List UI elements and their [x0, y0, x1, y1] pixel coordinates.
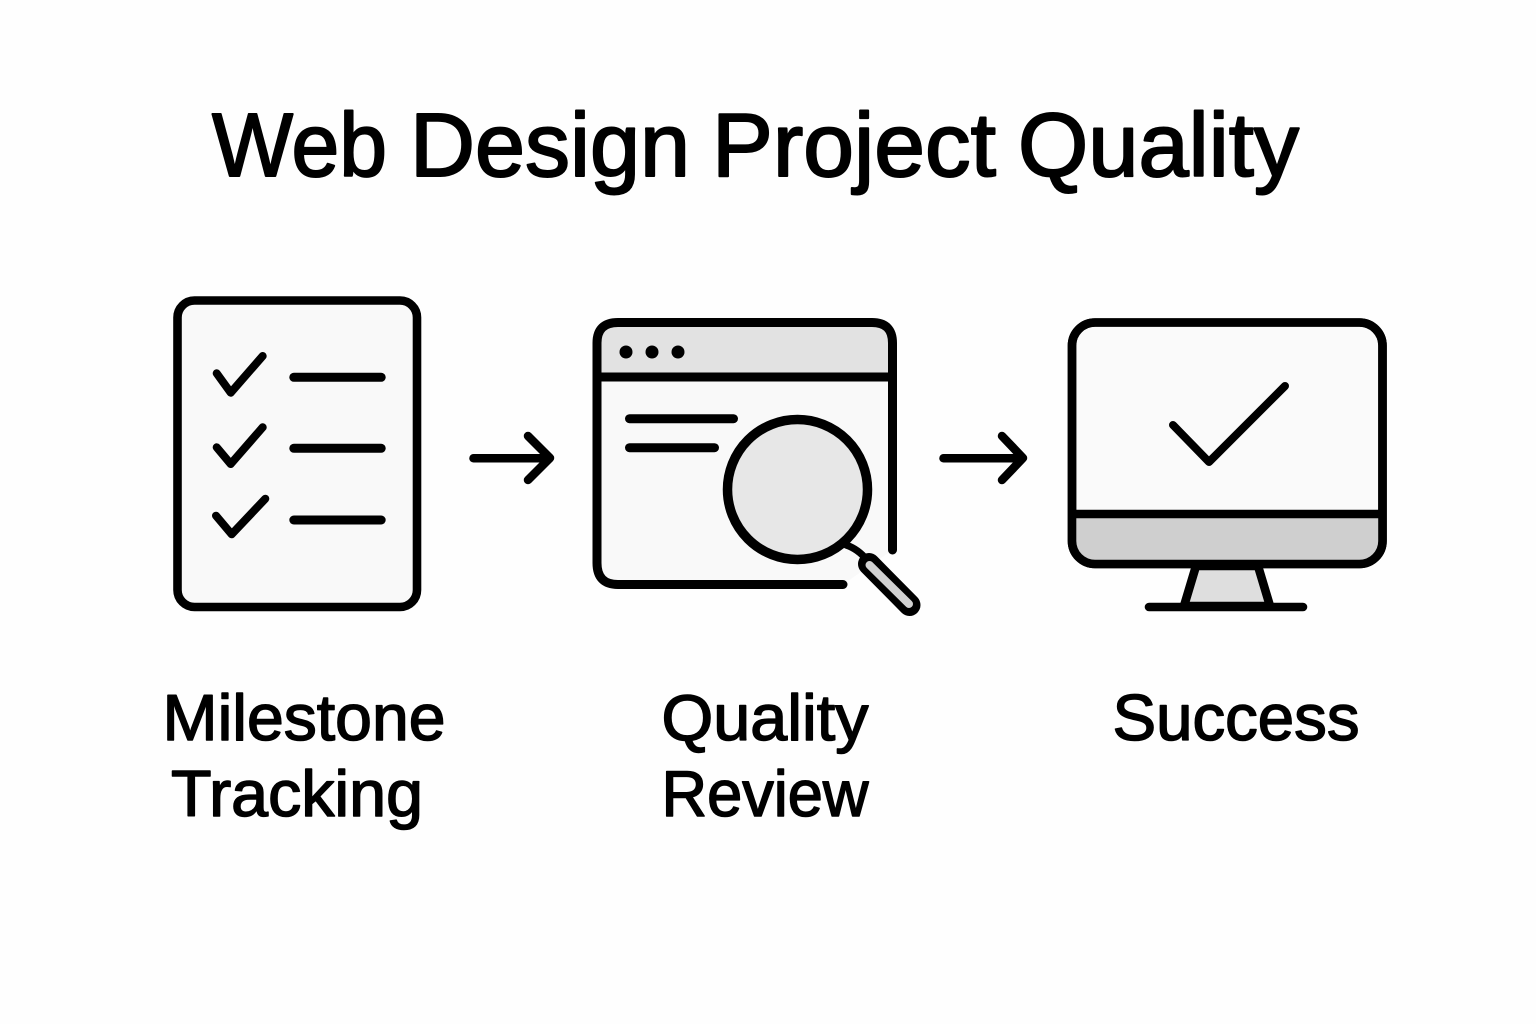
icon: monitor with checkmark	[1072, 322, 1382, 607]
title: Design	[410, 96, 690, 196]
label: quality review: Quality	[662, 681, 869, 754]
label: milestone tracking: Tracking	[171, 757, 423, 830]
icon: checklist document	[178, 300, 417, 607]
label: quality review	[662, 681, 870, 830]
label: success: Success	[1112, 681, 1360, 754]
label: quality review: Review	[662, 757, 870, 830]
label: milestone tracking	[162, 681, 446, 830]
title: Project	[712, 96, 996, 196]
label: milestone tracking: Milestone	[162, 681, 446, 754]
title: Quality	[1018, 96, 1299, 196]
title: Web	[212, 96, 387, 196]
arrow: checklist to review	[474, 436, 550, 480]
title	[212, 96, 1299, 196]
arrow: review to success	[944, 436, 1023, 480]
icon: browser with magnifying glass	[597, 322, 910, 605]
